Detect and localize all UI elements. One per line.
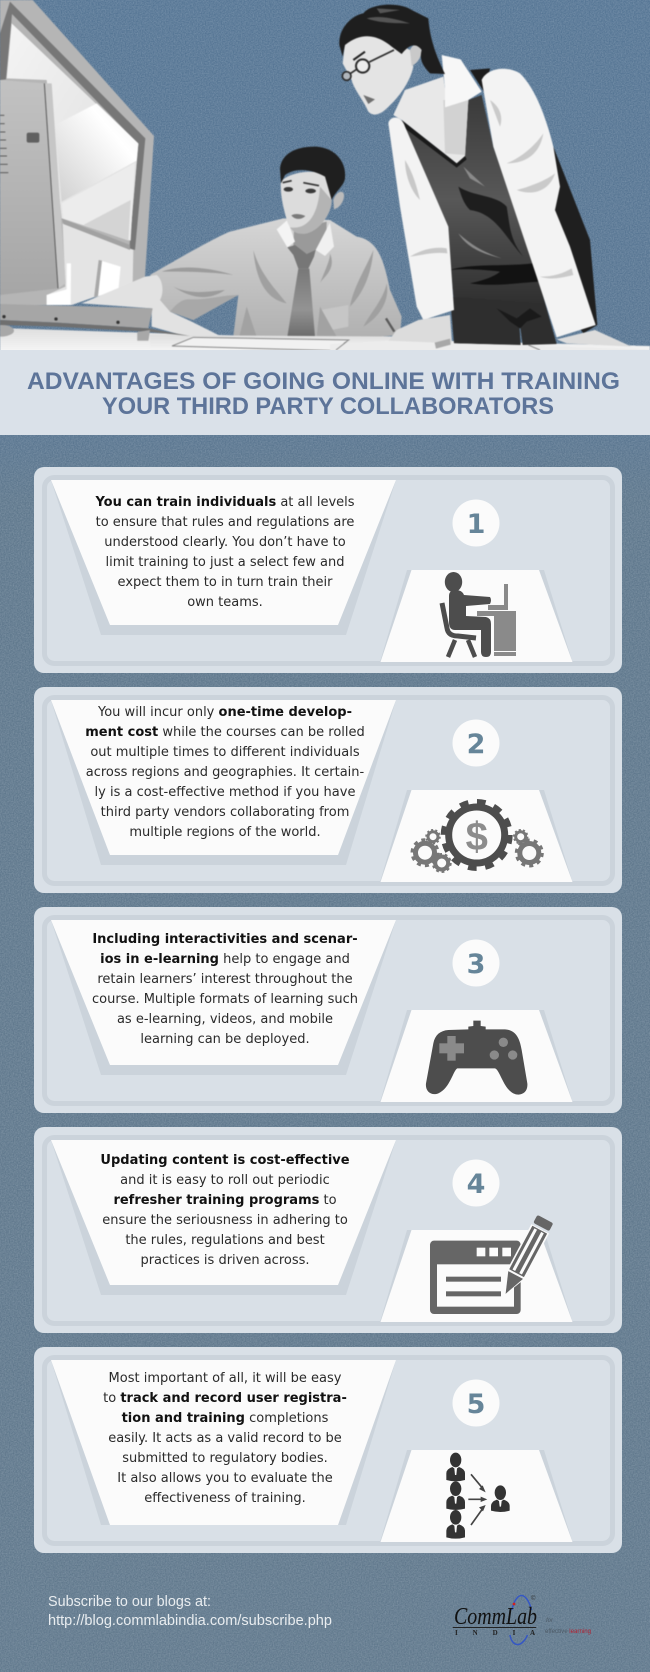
text block 1: to ensure that rules and regulations are bbox=[96, 515, 354, 530]
logo: CommLab India bbox=[452, 1594, 591, 1646]
logo: CommLab India: effective learning bbox=[545, 1629, 591, 1635]
number badge 3: 3 bbox=[467, 949, 485, 980]
title band bbox=[0, 350, 650, 435]
panel: card 2 bbox=[34, 687, 622, 893]
text block 4: ensure the seriousness in adhering to bbox=[102, 1213, 348, 1228]
text block 2: multiple regions of the world. bbox=[129, 825, 321, 840]
text block 2: across regions and geographies. It certain- bbox=[86, 765, 364, 780]
text block 2: ment cost while the courses can be rolled bbox=[85, 725, 365, 740]
text block 4: the rules, regulations and best bbox=[125, 1233, 325, 1248]
text block 2 bbox=[85, 705, 365, 840]
logo: CommLab India: for bbox=[546, 1618, 554, 1624]
icon: game controller bbox=[426, 1021, 527, 1095]
logo: CommLab India: CommLab bbox=[454, 1604, 537, 1630]
text block 5: effectiveness of training. bbox=[144, 1491, 306, 1506]
text block 3: Including interactivities and scenar- bbox=[92, 932, 358, 947]
text block 5: easily. It acts as a valid record to be bbox=[108, 1431, 342, 1446]
number badge 5 bbox=[452, 1380, 500, 1426]
icon: dollar gears bbox=[412, 802, 542, 872]
text block 5: It also allows you to evaluate the bbox=[117, 1471, 333, 1486]
icon: window and pencil bbox=[430, 1214, 554, 1314]
logo: CommLab India: I N D I A bbox=[455, 1629, 535, 1637]
text block 4: practices is driven across. bbox=[140, 1253, 310, 1268]
text block 5: tion and training completions bbox=[122, 1411, 328, 1426]
icon: dollar gears: $ bbox=[466, 815, 488, 859]
text block 4: refresher training programs to bbox=[113, 1193, 337, 1208]
man at desk bbox=[82, 147, 420, 352]
text block 1 bbox=[95, 495, 355, 610]
text block 1: understood clearly. You don’t have to bbox=[104, 535, 346, 550]
icon: people reporting to one person bbox=[446, 1453, 510, 1539]
text block 1: own teams. bbox=[187, 595, 263, 610]
hero illustration: two colleagues at a computer bbox=[0, 0, 650, 350]
text block 1: limit training to just a select few and bbox=[106, 555, 344, 570]
title heading: YOUR THIRD PARTY COLLABORATORS bbox=[102, 393, 554, 420]
number badge 1: 1 bbox=[467, 509, 485, 540]
panel: card 4 bbox=[34, 1127, 622, 1333]
number badge 4: 4 bbox=[467, 1169, 485, 1200]
text block 2: third party vendors collaborating from bbox=[101, 805, 349, 820]
woman leaning over bbox=[330, 5, 650, 355]
text block 5: to track and record user registra- bbox=[103, 1391, 347, 1406]
text block 3: course. Multiple formats of learning such bbox=[92, 992, 358, 1007]
number badge 3 bbox=[452, 940, 500, 986]
monitor and tower bbox=[0, 0, 154, 341]
text block 3: as e-learning, videos, and mobile bbox=[117, 1012, 333, 1027]
panel: card 3 bbox=[34, 907, 622, 1113]
title heading bbox=[27, 368, 620, 420]
text block 2: ly is a cost-effective method if you have bbox=[95, 785, 355, 800]
icon: person at desk bbox=[442, 572, 516, 657]
text block 3: learning can be deployed. bbox=[140, 1032, 310, 1047]
text block 4: and it is easy to roll out periodic bbox=[120, 1173, 330, 1188]
desk surface bbox=[0, 328, 650, 352]
text block 1: You can train individuals at all levels bbox=[95, 495, 355, 510]
text block 3 bbox=[92, 932, 358, 1047]
text block 3: retain learners’ interest throughout the bbox=[97, 972, 353, 987]
number badge 2 bbox=[452, 720, 500, 766]
text block 1: expect them to in turn train their bbox=[118, 575, 332, 590]
text block 2: out multiple times to different individuals bbox=[90, 745, 360, 760]
keyboard base of the computer bbox=[0, 304, 190, 341]
number badge 1 bbox=[452, 500, 500, 546]
number badge 4 bbox=[452, 1160, 500, 1206]
text block 5: Most important of all, it will be easy bbox=[109, 1371, 341, 1386]
number badge 5: 5 bbox=[467, 1389, 485, 1420]
footer subscribe text: Subscribe to our blogs at: bbox=[48, 1593, 211, 1610]
number badge 2: 2 bbox=[467, 729, 485, 760]
panel: card 5 bbox=[34, 1347, 622, 1553]
text block 3: ios in e-learning help to engage and bbox=[100, 952, 350, 967]
text block 5 bbox=[103, 1371, 347, 1506]
footer subscribe text bbox=[48, 1593, 332, 1629]
logo: CommLab India: © bbox=[531, 1595, 536, 1602]
panel: card 1 bbox=[34, 467, 622, 673]
text block 4 bbox=[100, 1153, 350, 1268]
title heading: ADVANTAGES OF GOING ONLINE WITH TRAINING bbox=[27, 368, 620, 395]
footer subscribe text: http://blog.commlabindia.com/subscribe.php bbox=[48, 1612, 332, 1629]
text block 4: Updating content is cost-effective bbox=[100, 1153, 350, 1168]
text block 2: You will incur only one-time develop- bbox=[98, 705, 352, 720]
text block 5: submitted to regulatory bodies. bbox=[122, 1451, 328, 1466]
